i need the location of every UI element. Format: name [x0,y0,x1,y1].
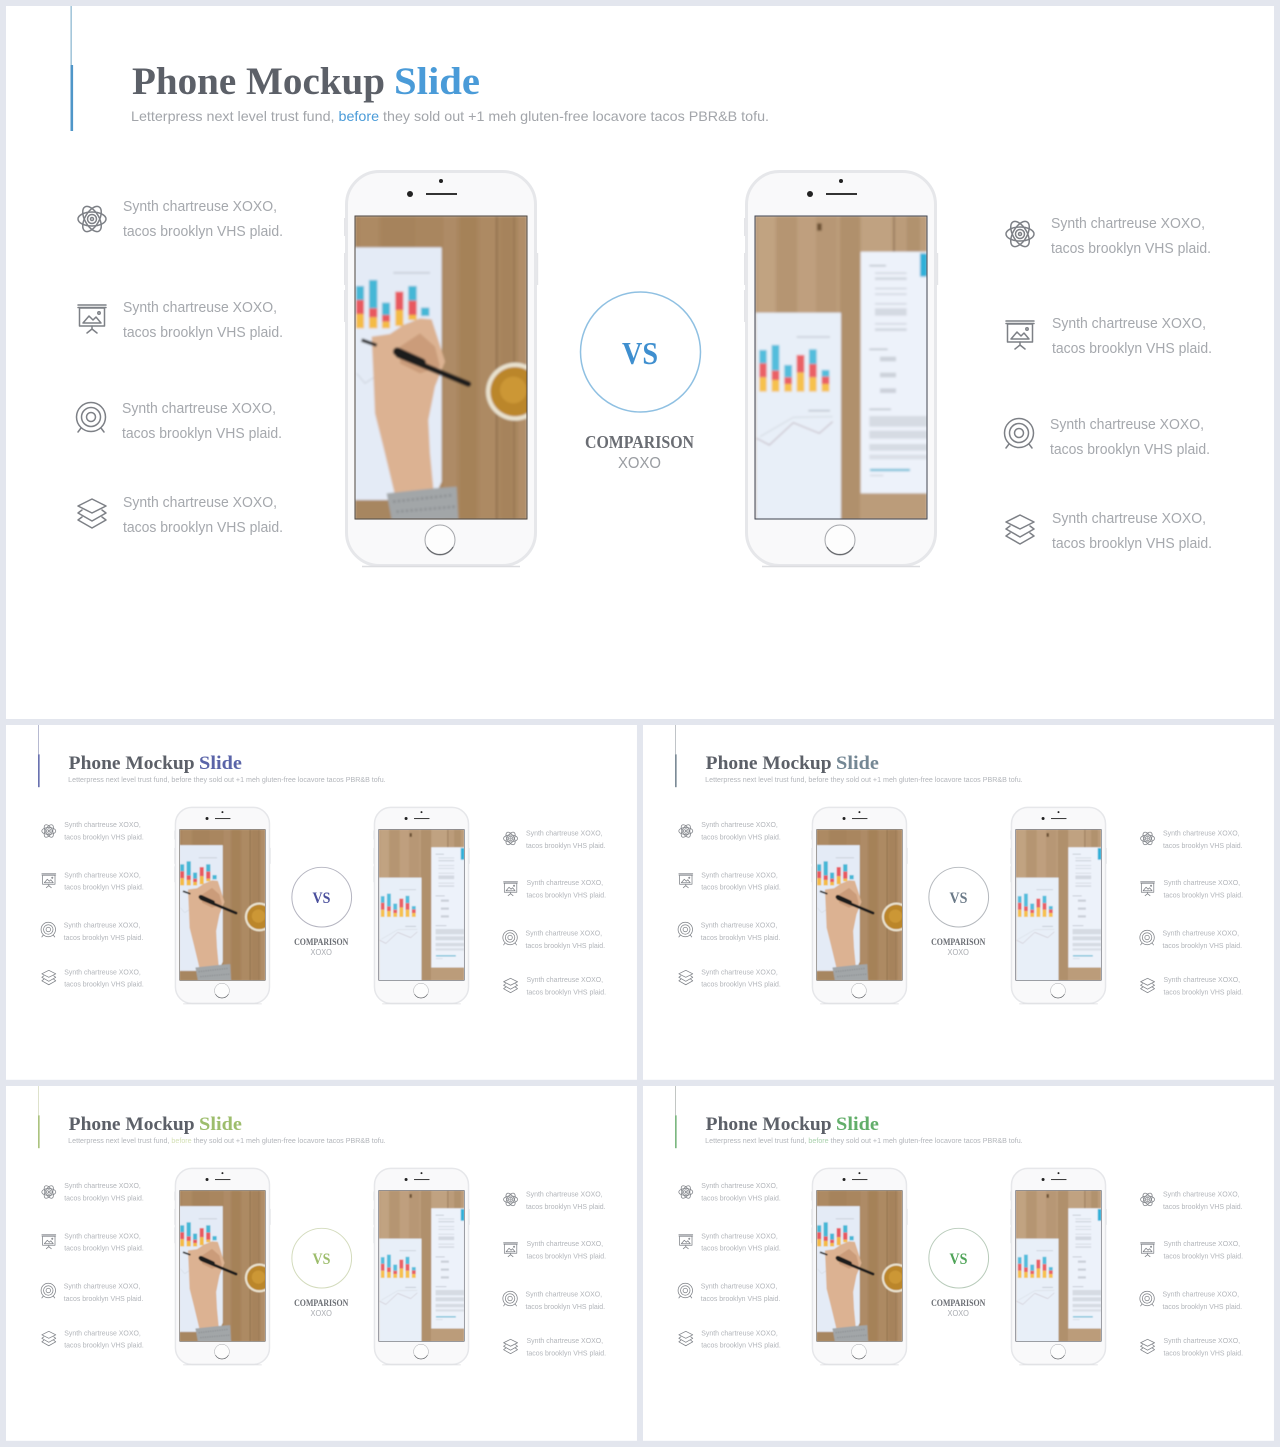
feature list: left: tacos brooklyn VHS plaid. [701,1294,780,1303]
feature list: left: Synth chartreuse XOXO, [701,1282,777,1291]
feature list: left [41,820,144,989]
accent line [675,725,677,787]
feature list: right: Synth chartreuse XOXO, [1162,928,1239,937]
feature text 4: tacos brooklyn VHS plaid. [123,519,283,536]
title: Phone Mockup [706,753,832,774]
feature text 3: tacos brooklyn VHS plaid. [1050,441,1210,458]
comparison badge: VS [950,890,968,907]
feature list: right: tacos brooklyn VHS plaid. [526,988,606,997]
comparison badge: COMPARISON [931,937,986,947]
phone mockup: left [811,1168,911,1365]
icon: atom [1006,218,1034,250]
panel: slide variant (green) [643,1086,1274,1441]
feature list: left [678,820,781,989]
feature list: right: tacos brooklyn VHS plaid. [1163,1252,1243,1261]
feature list: left: tacos brooklyn VHS plaid. [701,832,781,841]
feature list: left: Synth chartreuse XOXO, [701,870,778,879]
feature list: right: tacos brooklyn VHS plaid. [1162,941,1242,950]
feature list: left: tacos brooklyn VHS plaid. [701,1193,781,1202]
feature text 4: Synth chartreuse XOXO, [1052,510,1206,527]
panel: slide variant (lime) [6,1086,637,1441]
feature text 3: Synth chartreuse XOXO, [122,400,276,417]
comparison badge: VS [313,890,331,907]
comparison badge: XOXO [948,948,969,957]
feature list: left: tacos brooklyn VHS plaid. [64,1193,144,1202]
feature list: left: tacos brooklyn VHS plaid. [64,883,144,892]
feature list: right [1140,828,1243,997]
feature list: left: Synth chartreuse XOXO, [64,870,141,879]
title: Slide [836,1114,879,1135]
panel: slide variant (slate) [643,725,1274,1080]
feature text 2 [1052,315,1212,357]
feature list: right: Synth chartreuse XOXO, [526,878,603,887]
phone mockup: right [373,1168,470,1365]
title: Phone Mockup [132,60,385,103]
title: Phone Mockup [706,1114,832,1135]
panel: slide variant (indigo) [6,725,637,1080]
comparison badge: XOXO [311,948,332,957]
feature list: right: Synth chartreuse XOXO, [1163,1239,1240,1248]
feature list: right [503,1189,606,1358]
feature list: left: tacos brooklyn VHS plaid. [64,980,144,989]
feature list: right: tacos brooklyn VHS plaid. [526,841,606,850]
comparison badge [292,867,352,957]
feature list: left: Synth chartreuse XOXO, [701,967,778,976]
feature list: right: tacos brooklyn VHS plaid. [526,1252,606,1261]
feature text 2: tacos brooklyn VHS plaid. [1052,340,1212,357]
icon: target [76,402,106,432]
feature text 4 [123,494,283,536]
phone mockup: left [174,1168,274,1365]
feature list: right: Synth chartreuse XOXO, [526,1336,603,1345]
subtitle: Letterpress next level trust fund, before they sold out +1 meh gluten-free locavore tacos PBR&B tofu. [68,777,386,784]
feature list: right: Synth chartreuse XOXO, [525,928,602,937]
feature list: right [1140,1189,1243,1358]
feature list: left: tacos brooklyn VHS plaid. [64,1341,144,1350]
feature list: left [76,198,283,536]
title: Slide [394,60,480,103]
subtitle: Letterpress next level trust fund, before they sold out +1 meh gluten-free locavore tacos PBR&B tofu. [131,108,769,124]
comparison badge: XOXO [948,1309,969,1318]
phone mockup: right [744,172,938,566]
feature list: right: Synth chartreuse XOXO, [1163,878,1240,887]
feature text 1: Synth chartreuse XOXO, [123,198,277,215]
feature list: left: Synth chartreuse XOXO, [64,921,140,930]
subtitle: Letterpress next level trust fund, before they sold out +1 meh gluten-free locavore tacos PBR&B tofu. [705,777,1023,784]
comparison badge: XOXO [618,455,661,472]
feature list: right: tacos brooklyn VHS plaid. [526,1349,606,1358]
feature list: left: Synth chartreuse XOXO, [701,921,777,930]
feature list: right: Synth chartreuse XOXO, [1163,1189,1240,1198]
feature list: right: tacos brooklyn VHS plaid. [1163,988,1243,997]
comparison badge [929,1228,989,1318]
feature text 3 [122,400,282,442]
phone mockup: right [1010,1168,1107,1365]
accent line [70,6,73,131]
comparison badge: COMPARISON [931,1298,986,1308]
feature text 1 [1051,215,1211,257]
feature list: left: tacos brooklyn VHS plaid. [64,1244,144,1253]
icon: presentation board [1006,321,1034,349]
comparison badge [292,1228,352,1318]
title: Slide [199,1114,242,1135]
accent line [675,1086,677,1148]
feature text 2 [123,299,283,341]
feature text 3 [1050,416,1210,458]
feature list: right: Synth chartreuse XOXO, [1163,975,1240,984]
feature list: left: Synth chartreuse XOXO, [64,1181,141,1190]
comparison badge: VS [950,1251,968,1268]
feature list: left: tacos brooklyn VHS plaid. [701,980,781,989]
icon: presentation board [78,305,106,333]
feature text 3: tacos brooklyn VHS plaid. [122,425,282,442]
feature text 2: Synth chartreuse XOXO, [123,299,277,316]
feature list: right: tacos brooklyn VHS plaid. [526,1202,606,1211]
feature list: right: tacos brooklyn VHS plaid. [525,941,605,950]
feature list: right [1004,215,1212,552]
feature list: right: Synth chartreuse XOXO, [1163,1336,1240,1345]
feature text 3: Synth chartreuse XOXO, [1050,416,1204,433]
accent line [38,725,40,787]
feature list: right: Synth chartreuse XOXO, [526,1239,603,1248]
feature list: left: Synth chartreuse XOXO, [701,1328,778,1337]
comparison badge: VS [313,1251,331,1268]
panel: main slide (blue) [6,6,1274,719]
feature list: left: tacos brooklyn VHS plaid. [701,1341,781,1350]
title: Phone Mockup [69,753,195,774]
phone mockup: left [174,807,274,1004]
feature list: left: Synth chartreuse XOXO, [64,967,141,976]
feature list: left: tacos brooklyn VHS plaid. [64,933,143,942]
icon: layers [1006,515,1034,544]
title: Slide [199,753,242,774]
comparison badge: COMPARISON [294,937,349,947]
feature list: right: Synth chartreuse XOXO, [525,1289,602,1298]
phone mockup: right [1010,807,1107,1004]
feature list: left: tacos brooklyn VHS plaid. [64,832,144,841]
feature list: right: tacos brooklyn VHS plaid. [526,891,606,900]
comparison badge [580,292,700,472]
feature list: right: Synth chartreuse XOXO, [526,1189,603,1198]
feature list: right [503,828,606,997]
feature text 2: Synth chartreuse XOXO, [1052,315,1206,332]
feature list: left [41,1181,144,1350]
icon: layers [78,499,106,528]
feature list: left [678,1181,781,1350]
feature list: right: tacos brooklyn VHS plaid. [1163,1202,1243,1211]
subtitle: Letterpress next level trust fund, before they sold out +1 meh gluten-free locavore tacos PBR&B tofu. [705,1138,1023,1145]
feature text 1: tacos brooklyn VHS plaid. [1051,240,1211,257]
feature text 1: Synth chartreuse XOXO, [1051,215,1205,232]
feature list: left: tacos brooklyn VHS plaid. [64,1294,143,1303]
feature list: right: tacos brooklyn VHS plaid. [525,1302,605,1311]
feature list: left: Synth chartreuse XOXO, [701,1181,778,1190]
comparison badge: COMPARISON [294,1298,349,1308]
comparison badge [929,867,989,957]
feature list: right: Synth chartreuse XOXO, [526,975,603,984]
feature list: left: Synth chartreuse XOXO, [64,1282,140,1291]
title: Slide [836,753,879,774]
title: Phone Mockup [69,1114,195,1135]
feature list: right: tacos brooklyn VHS plaid. [1163,891,1243,900]
feature list: left: tacos brooklyn VHS plaid. [701,1244,781,1253]
feature list: left: tacos brooklyn VHS plaid. [701,883,781,892]
phone mockup: left [344,172,544,566]
feature list: right: Synth chartreuse XOXO, [1162,1289,1239,1298]
feature text 2: tacos brooklyn VHS plaid. [123,324,283,341]
feature text 4: Synth chartreuse XOXO, [123,494,277,511]
icon: target [1004,418,1034,448]
feature text 1: tacos brooklyn VHS plaid. [123,223,283,240]
feature list: right: tacos brooklyn VHS plaid. [1163,1349,1243,1358]
phone mockup: left [811,807,911,1004]
feature list: left: Synth chartreuse XOXO, [701,1231,778,1240]
subtitle: Letterpress next level trust fund, before they sold out +1 meh gluten-free locavore tacos PBR&B tofu. [68,1138,386,1145]
feature list: right: Synth chartreuse XOXO, [526,828,603,837]
feature list: left: Synth chartreuse XOXO, [64,1328,141,1337]
feature list: left: Synth chartreuse XOXO, [64,1231,141,1240]
feature list: right: tacos brooklyn VHS plaid. [1162,1302,1242,1311]
feature list: right: Synth chartreuse XOXO, [1163,828,1240,837]
feature list: left: Synth chartreuse XOXO, [64,820,141,829]
comparison badge: COMPARISON [585,432,694,452]
feature text 4 [1052,510,1212,552]
feature list: right: tacos brooklyn VHS plaid. [1163,841,1243,850]
accent line [38,1086,40,1148]
feature list: left: Synth chartreuse XOXO, [701,820,778,829]
feature text 1 [123,198,283,240]
phone mockup: right [373,807,470,1004]
comparison badge: VS [622,335,658,371]
feature list: left: tacos brooklyn VHS plaid. [701,933,780,942]
icon: atom [78,203,106,235]
comparison badge: XOXO [311,1309,332,1318]
feature text 4: tacos brooklyn VHS plaid. [1052,535,1212,552]
